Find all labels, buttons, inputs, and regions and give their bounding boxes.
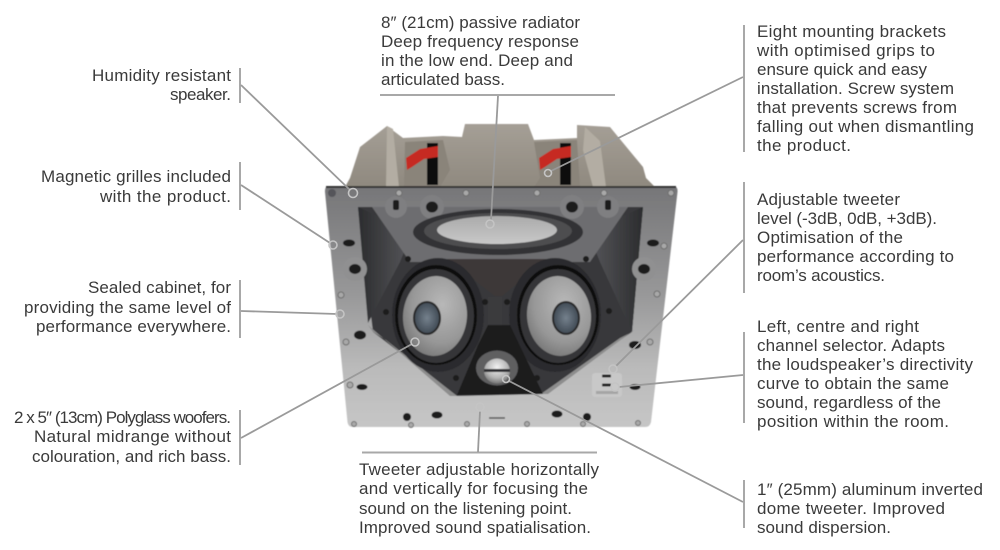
text: tweeter adjustable [359,460,600,537]
text: channel selector: channel selector. Adapts [757,336,945,355]
text: sealed cabinet: performance everywhere. [36,317,231,336]
tweeter dome [476,350,518,386]
callout: passive radiator [380,13,615,228]
text: tweeter level [757,190,954,285]
channel selector plate [592,373,622,397]
text: woofers [14,408,231,466]
leader line: tweeter level [609,182,744,373]
text: humidity resistant: speaker. [170,85,231,104]
text: sealed cabinet: Sealed cabinet, for [88,278,231,297]
text: sealed cabinet: providing the same level of [24,298,231,317]
text: mounting brackets: installation. Screw system [757,79,954,98]
text: tweeter level: room’s acoustics. [757,266,885,285]
text: mounting brackets: the product. [757,136,851,155]
text: woofers: 2 x 5″ (13cm) Polyglass woofers. [14,408,231,427]
rear housing [345,124,655,187]
text: passive radiator: Deep frequency response [381,32,579,51]
text: magnetic grilles: Magnetic grilles included [41,167,231,186]
leader line: tweeter adjustable [362,403,597,452]
text: woofers: Natural midrange without [34,427,231,446]
text: channel selector: the loudspeaker’s directivity [757,355,974,374]
callout: humidity resistant [92,66,358,198]
text: magnetic grilles [41,167,231,206]
screws and holes [343,200,659,421]
text: passive radiator: articulated bass. [381,70,505,89]
text: channel selector: position within the room. [757,412,949,431]
tweeter housing [457,297,543,395]
right woofer [509,258,601,372]
acoustic foam [447,259,547,296]
text: inverted dome tweeter: sound dispersion. [757,518,891,537]
text: tweeter adjustable: sound on the listening point. [359,499,572,518]
leader line: passive radiator [380,95,615,228]
callout: channel selector [611,317,974,431]
text: mounting brackets: Eight mounting brackets [757,22,946,41]
text: mounting brackets: falling out when dismantling [757,117,974,136]
leader line: sealed cabinet [240,280,344,338]
callout: sealed cabinet [24,278,344,338]
callout: magnetic grilles [41,162,337,249]
leader line: magnetic grilles [240,162,337,249]
text: tweeter level: level (-3dB, 0dB, +3dB). [757,209,937,228]
text: channel selector: curve to obtain the same [757,374,949,393]
text: mounting brackets: with optimised grips to [756,41,935,60]
text: humidity resistant: Humidity resistant [92,66,231,85]
text: tweeter adjustable: Tweeter adjustable horizontally [359,460,600,479]
leader line: channel selector [611,332,744,423]
text: mounting brackets: ensure quick and easy [757,60,928,79]
text: inverted dome tweeter: dome tweeter. Improved [757,499,945,518]
callout: tweeter level [609,182,954,373]
leader line: inverted dome tweeter [502,376,744,528]
text: tweeter level: performance according to [757,247,954,266]
text: inverted dome tweeter: 1″ (25mm) aluminum inverted [757,480,983,499]
text: inverted dome tweeter [757,480,983,537]
callout: tweeter adjustable [359,403,600,537]
text: channel selector [757,317,974,431]
mounting brackets [406,143,571,185]
text: tweeter level: Optimisation of the [757,228,903,247]
text: passive radiator [381,13,580,89]
text: humidity resistant [92,66,231,104]
speaker photo illustration [325,124,678,428]
text: mounting brackets [756,22,974,155]
text: passive radiator: 8″ (21cm) passive radiator [381,13,580,32]
text: channel selector: sound, regardless of the [757,393,941,412]
callout: woofers [14,338,419,466]
text: tweeter adjustable: and vertically for focusing the [359,479,588,498]
left woofer [392,258,484,372]
speaker cavity [358,207,643,396]
leader line: woofers [240,338,419,465]
leader line: humidity resistant [240,68,358,198]
text: sealed cabinet [24,278,231,336]
plate scallops [343,195,656,281]
text: magnetic grilles: with the product. [99,187,231,206]
text: passive radiator: in the low end. Deep and [381,51,573,70]
leader line: mounting brackets [544,25,744,176]
front plate [325,186,678,427]
callout: inverted dome tweeter [502,376,983,537]
text: mounting brackets: that prevents screws from [757,98,957,117]
text: channel selector: Left, centre and right [757,317,919,336]
text: tweeter level: Adjustable tweeter [757,190,900,209]
text: woofers: colouration, and rich bass. [32,447,231,466]
text: tweeter adjustable: Improved sound spatialisation. [359,518,591,537]
passive radiator [413,209,583,255]
callout: mounting brackets [544,22,974,176]
